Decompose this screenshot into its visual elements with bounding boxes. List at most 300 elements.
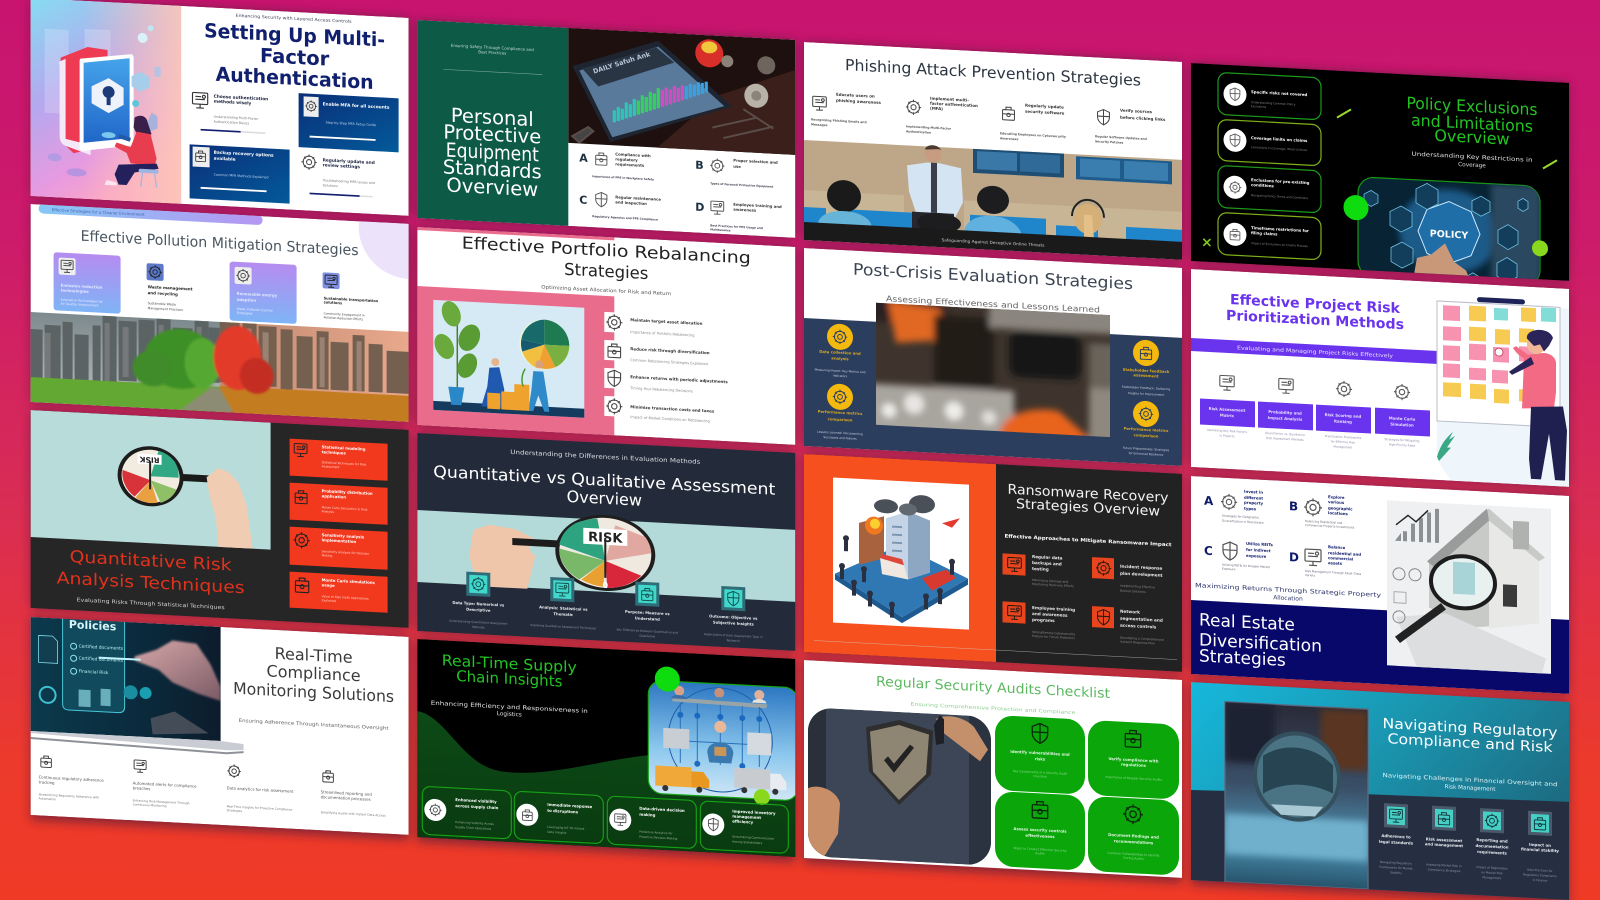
item D: D: [695, 201, 704, 214]
column text: Assessing Market Risk in: [1426, 862, 1462, 868]
item row: before clicking links: [1120, 115, 1166, 122]
column text: and management: [1425, 841, 1463, 848]
risk item cards: [290, 439, 388, 613]
checklist cards: regulations: [1121, 762, 1147, 768]
column labels: Key Differences Between Quantitative and: [617, 627, 678, 635]
card contents: to disruptions: [547, 808, 579, 814]
recovery items: [1002, 552, 1164, 646]
items: Invest in: [1244, 489, 1263, 495]
subtitle: Understanding the Differences in Evaluation Methods: [510, 449, 700, 466]
navy lower panel: [1191, 782, 1569, 900]
title: Prioritization Methods: [1226, 308, 1404, 333]
item columns: Simplifying Audits with Instant Data Access: [321, 810, 386, 818]
left rounded cards: conditions: [1251, 182, 1274, 188]
item A: regulatory: [615, 156, 638, 163]
method boxes: Monte Carlo: [1389, 415, 1416, 422]
right column: Stakeholder feedback: [1123, 367, 1170, 374]
title: [464, 236, 750, 282]
column text: legal standards: [1379, 839, 1414, 846]
title: Monitoring Solutions: [233, 679, 394, 706]
item D: awareness: [733, 207, 757, 213]
card contents: making: [639, 812, 656, 818]
item D: Maintenance: [710, 227, 731, 232]
left column: comparison: [828, 416, 853, 423]
right column: comparison: [1134, 432, 1159, 439]
recovery items: backups and: [1032, 560, 1062, 567]
photo: house under magnifier: [1387, 500, 1551, 674]
risk item cards: Analysis: [322, 509, 334, 514]
item A: [579, 150, 654, 181]
column text: in Finance: [1533, 878, 1548, 883]
column text: Impact on: [1529, 842, 1551, 848]
risk item cards: Value at Risk (VaR) Approaches: [322, 594, 369, 601]
slide: Real Estate Diversification Strategies: [1191, 476, 1569, 694]
recovery items: testing: [1032, 566, 1049, 572]
subtitle: Best Practices: [478, 49, 506, 56]
orange panel: [804, 454, 996, 662]
decorative x: ×: [1201, 235, 1213, 251]
recovery items: Implementing Effective: [1120, 584, 1155, 589]
title: Analysis Techniques: [57, 568, 245, 597]
title: Ransomware Recovery: [1008, 482, 1169, 506]
item B: use: [733, 164, 741, 169]
recovery items: programs: [1032, 617, 1055, 623]
left column: Performance metrics: [818, 409, 863, 416]
risk item cards: application: [322, 493, 346, 500]
method boxes: Ranking: [1334, 419, 1352, 424]
column labels: Thematic: [553, 611, 573, 617]
column labels: Methods: [472, 625, 485, 630]
column labels: Understanding Quantitative Assessment: [449, 619, 508, 626]
item row: Implement multi-: [930, 96, 969, 103]
card contents: Immediate response: [547, 802, 592, 809]
photo: blurred conference room: [864, 291, 1119, 450]
item A: Importance of PPE in Workplace Safety: [592, 174, 654, 181]
column text: Regulatory Compliance: [1523, 872, 1557, 878]
method boxes: [1200, 398, 1430, 454]
recovery items: Regular data: [1032, 554, 1063, 561]
left column: Measuring Impact: Key Metrics and: [815, 368, 866, 374]
risk item cards: Assessment: [322, 464, 340, 469]
item row: Messages: [811, 122, 828, 127]
recovery items: access controls: [1120, 623, 1157, 630]
column text: Stability: [1390, 870, 1402, 875]
title: Overview: [1434, 126, 1510, 149]
subtitle: Enhancing Security with Layered Access Controls: [236, 13, 352, 24]
column labels: [449, 600, 763, 644]
left column: Lessons Learned: Documenting: [817, 430, 863, 436]
item columns: [39, 754, 386, 821]
recovery items: Incident Response Plan: [1120, 640, 1155, 645]
column text: Compliance Strategies: [1428, 867, 1461, 873]
column labels: Exploring Qualitative Assessment Techniques: [531, 623, 597, 630]
item D: Best Practices for PPE Usage and: [710, 223, 763, 230]
card contents: Improved inventory: [732, 809, 776, 816]
card contents: Proactive Decision-Making: [639, 835, 677, 841]
rebalancing items: Impact of Market Conditions on Rebalancing: [630, 415, 710, 423]
item A: requirements: [615, 161, 645, 168]
cards: bottom insights: [422, 786, 788, 853]
item: backup recovery: Common MFA Methods Explained: [214, 173, 269, 179]
lower background wash: [1437, 302, 1569, 487]
slide: Real-Time Supply Chain Insights: [417, 639, 798, 864]
slide: Phishing Attack Prevention Strategies: [804, 42, 1182, 260]
card contents: Data-driven decision: [639, 806, 685, 813]
photo: shield on jacket: [808, 707, 991, 866]
left column: Indicators: [833, 374, 848, 378]
left rounded cards: Exclusions for pre-existing: [1251, 177, 1310, 185]
left rounded cards: Specific risks not covered: [1251, 89, 1308, 97]
item C: Regulatory Agencies and PPE Compliance: [592, 214, 658, 222]
title: Real-Time: [275, 644, 353, 667]
title: Real-Time Supply: [442, 651, 577, 676]
items: C: [1204, 544, 1213, 558]
item: regularly update: Troubleshooting MFA Issues and: [322, 178, 375, 185]
title: Effective Portfolio Rebalancing: [462, 233, 751, 268]
card contents: Leveraging IoT for Instant: [547, 825, 585, 831]
subtitle: [1382, 773, 1558, 796]
column text: Reporting and: [1476, 837, 1508, 844]
items: Utilize REITs: [1246, 541, 1273, 547]
item row: Regular Software Updates and: [1095, 134, 1147, 141]
item A: Compliance with: [615, 151, 651, 158]
items: for indirect: [1246, 547, 1271, 553]
checklist cards: Identify vulnerabilities and: [1010, 749, 1070, 757]
divider: [443, 69, 542, 75]
checklist cards: Verify compliance with: [1109, 756, 1159, 764]
column labels: Understand: [635, 615, 660, 622]
risk item cards: Statistical modeling: [322, 444, 366, 452]
left column: Data collection and: [819, 349, 861, 356]
recovery items: Employee training: [1032, 605, 1075, 612]
item: enable MFA: Step-by-Step MFA Setup Guide: [326, 120, 376, 127]
items: residential and: [1328, 550, 1361, 557]
subtitle pill: [39, 203, 263, 225]
item columns: Data analytics for risk assessment: [227, 785, 294, 794]
slide: Post-Crisis Evaluation Strategies: [804, 248, 1182, 466]
recovery items: Backup Solutions: [1120, 589, 1146, 594]
items: Balancing Residential and: [1305, 519, 1343, 525]
rebalancing items: Common Rebalancing Strategies Explained: [630, 358, 708, 366]
title: [1008, 482, 1169, 520]
method boxes: Simulation: [1390, 421, 1414, 428]
title: Setting Up Multi-: [204, 19, 385, 52]
photo: polluted vs clean city: [31, 312, 409, 422]
card: renewable energy: adoption: [237, 297, 256, 303]
checklist cards: Assess security controls: [1013, 826, 1067, 834]
items: assets: [1328, 560, 1343, 566]
photo: magnifying glass: [1225, 702, 1368, 889]
item B: [696, 158, 778, 188]
method boxes: Risk Assessment: [1209, 406, 1246, 413]
illustration: city disaster: [833, 478, 969, 630]
slide: Navigating Regulatory Compliance and Risk: [1191, 682, 1569, 900]
left rounded cards: Coverage limits on claims: [1251, 135, 1308, 143]
card contents: Among Stakeholders: [732, 840, 763, 845]
rebalancing items: Minimize transaction costs and taxes: [630, 404, 715, 414]
item row: Authentication: [906, 129, 931, 135]
item row: Awareness: [1000, 136, 1019, 141]
title: Effective Pollution Mitigation Strategies: [81, 229, 359, 259]
title: [1226, 292, 1404, 333]
column labels: Research: [727, 638, 740, 643]
risk item cards: Sensitivity Analysis for Decision: [322, 549, 369, 556]
risk item cards: Probability distribution: [322, 488, 373, 496]
risk item cards: Explained: [322, 598, 336, 603]
title: Real Estate: [1199, 610, 1295, 635]
method boxes: Risk Assessment Methods: [1266, 436, 1304, 442]
column labels: Analysis: Statistical vs: [539, 604, 588, 612]
item: transportation: solutions: [324, 300, 342, 305]
decorative marks: [1337, 109, 1557, 169]
title: [206, 23, 384, 89]
subtitle: Allocation: [1273, 594, 1303, 603]
right column: Performance metrics: [1124, 426, 1169, 433]
items: Explore: [1328, 494, 1345, 500]
title: Factor: [260, 44, 330, 71]
left rounded cards: Exclusions: [1251, 104, 1267, 109]
card: emission reduction: [54, 252, 121, 314]
item: waste management: Management Practices: [148, 306, 183, 312]
title: Strategies: [1199, 646, 1286, 671]
item columns: Streamlined reporting and: [321, 789, 372, 797]
checklist cards: During Audits: [1123, 856, 1144, 861]
risk item cards: usage: [322, 582, 335, 588]
items: various: [1328, 499, 1345, 505]
recovery items: plan development: [1120, 571, 1163, 578]
item columns: Enhancing Risk Management Through: [133, 798, 190, 805]
baseline rule: [814, 641, 1177, 660]
subtitle: [1412, 152, 1533, 172]
method boxes: Probability and: [1268, 409, 1302, 416]
photo: laptop with policies screen: Financial Risk: [79, 669, 109, 676]
method boxes: Risk Scoring and: [1325, 412, 1362, 419]
risk item cards: techniques: [322, 449, 346, 456]
item: waste management: Sustainable Waste: [148, 301, 176, 307]
item: transportation: [323, 272, 379, 322]
title: Phishing Attack Prevention Strategies: [845, 56, 1141, 90]
subtitle: Evaluating Risks Through Statistical Techniques: [77, 597, 225, 611]
card: emission reduction: Emission reduction: [61, 283, 103, 290]
illustration: logistics network: [648, 666, 798, 807]
item: choose methods: Understanding Multi-Factor: [214, 115, 259, 121]
slide: Effective Pollution Mitigation Strategies: [30, 204, 409, 422]
item row: phishing awareness: [836, 98, 881, 105]
checklist cards: effectiveness: [1025, 833, 1055, 839]
right column: assessment: [1133, 372, 1159, 379]
item row: [811, 89, 1166, 149]
subtitle: Ensuring Adherence Through Instantaneous Oversight: [239, 718, 389, 732]
slide: Effective Portfolio Rebalancing Strategies: [417, 227, 795, 445]
method boxes: Strategies for Mitigating: [1384, 437, 1420, 443]
column labels: Subjective Insights: [713, 620, 754, 627]
left column: analysis: [831, 355, 849, 361]
item B: Proper selection and: [733, 158, 778, 165]
title: Policy Exclusions: [1406, 93, 1537, 119]
item row: Educating Employees on Cybersecurity: [1000, 131, 1066, 139]
photo: tablet dashboard: [568, 28, 795, 155]
method boxes: Impact Analysis: [1268, 415, 1303, 422]
items: commercial: [1328, 555, 1353, 562]
item D: Employee training and: [733, 202, 782, 209]
title: [234, 647, 394, 702]
items: Commercial Property Investments: [1305, 523, 1355, 530]
items: Risk Management Through Asset Class: [1305, 569, 1362, 576]
checklist cards: recommendations: [1114, 838, 1154, 845]
items: B: [1289, 499, 1298, 514]
card: emission reduction: technologies: [61, 288, 89, 294]
item columns: Streamlining Regulatory Adherence with: [39, 792, 99, 800]
rebalancing items: Maintain target asset allocation: [630, 317, 703, 326]
card contents: Enhancing Visibility Across: [455, 820, 494, 826]
subtitle: Assessing Effectiveness and Lessons Learned: [886, 294, 1100, 315]
title: Strategies Overview: [1016, 496, 1160, 520]
photo: hand with risk magnifier: [31, 410, 271, 550]
slide: Policy Exclusions and Limitations Overview: [1191, 63, 1569, 303]
risk item cards: implementation: [322, 537, 357, 544]
item C: [579, 191, 661, 222]
card: emission reduction: Innovative Technologies for: [61, 298, 104, 304]
subtitle: Risk Management: [1444, 784, 1496, 793]
title: Quantitative vs Qualitative Assessment: [433, 462, 775, 499]
title: Compliance: [267, 661, 361, 685]
title: [1406, 93, 1538, 150]
item columns: Strategies: [227, 808, 242, 813]
right column: Future Preparedness: Strategies: [1123, 446, 1170, 452]
items: [1204, 487, 1362, 580]
rebalancing items: [604, 312, 728, 424]
risk item cards: Making: [322, 553, 332, 558]
title: Personal: [451, 104, 534, 131]
column labels: Applications of Each Assessment Type in: [704, 632, 763, 639]
column text: Frameworks for Market: [1379, 865, 1413, 871]
column labels: Data Type: Numerical vs: [452, 600, 505, 608]
items: exposure: [1246, 553, 1267, 559]
task board illustration: [1437, 295, 1567, 481]
item columns: Real-Time Insights for Proactive Compliance: [227, 804, 293, 812]
item: transportation: Community Engagement in: [324, 311, 365, 318]
item C: Regular maintenance: [615, 194, 661, 202]
column text: Risk assessment: [1426, 836, 1462, 843]
item C: C: [579, 194, 587, 207]
slide: Setting Up Multi-Factor Authentication: [31, 0, 409, 216]
title: Authentication: [216, 63, 374, 94]
item: backup recovery: Backup recovery options: [214, 150, 274, 159]
column text: Navigating Regulatory: [1380, 860, 1412, 866]
item: transportation: Sustainable transportation: [324, 296, 379, 303]
method boxes: Matrix: [1220, 413, 1235, 418]
recovery items: Incident response: [1120, 564, 1162, 571]
method icons: [1220, 374, 1410, 401]
items: Diversification in Real Estate: [1222, 519, 1264, 525]
item row: Regularly update: [1025, 103, 1064, 110]
item columns: tracking: [39, 779, 55, 785]
recovery items: Minimizing Damage and: [1032, 578, 1068, 584]
footer bar: [804, 222, 1182, 260]
checklist cards: Checklist: [1033, 774, 1048, 779]
item columns: breaches: [133, 785, 150, 791]
recovery items: Network: [1120, 609, 1140, 615]
title: Strategies: [564, 260, 648, 283]
subtitle: Ensuring Comprehensive Protection and Compliance: [911, 702, 1076, 716]
item: enable MFA: Enable MFA for all accounts: [323, 101, 390, 111]
items: Exposure: [1222, 567, 1236, 571]
green panel: [417, 20, 568, 226]
checklist cards: Importance of Regular Security Audits: [1105, 775, 1162, 782]
right column: Stakeholder Feedback: Gathering: [1122, 385, 1170, 391]
subtitle: Navigating Challenges in Financial Oversight and: [1382, 773, 1558, 788]
items: Variety: [1305, 573, 1315, 578]
column text: on Market Risk: [1481, 870, 1503, 875]
slide: Effective Project Risk Prioritization Methods: [1191, 269, 1569, 487]
photo: laptop with policies screen: Certified documents: [79, 644, 124, 652]
column labels: Qualitative: [639, 634, 655, 639]
items: property: [1244, 500, 1264, 506]
card contents: across supply chain: [455, 803, 499, 810]
column labels: Outcome: Objective vs: [709, 613, 758, 621]
rebalancing items: Reduce risk through diversification: [630, 346, 710, 355]
pink panel: [417, 227, 614, 435]
subtitle pill: Effective Strategies for a Cleaner Environment: [52, 207, 145, 217]
slide: Regular Security Audits Checklist: [804, 660, 1182, 885]
risk item cards: Monte Carlo simulations: [322, 577, 376, 585]
item D: [696, 200, 782, 232]
title: Overview: [446, 174, 538, 201]
method boxes: in Projects: [1220, 433, 1235, 438]
items: types: [1244, 506, 1257, 511]
subtitle: Coverage: [1458, 162, 1486, 170]
title: Chain Insights: [456, 667, 563, 691]
item: transportation: Pollution Reduction Efforts: [324, 315, 364, 321]
item: regularly update: Solutions: [323, 183, 338, 188]
recovery items: segmentation and: [1120, 616, 1163, 623]
rebalancing items: Enhance returns with periodic adjustments: [630, 374, 728, 384]
recovery items: Strengthening Cybersecurity: [1032, 630, 1075, 636]
checklist cards: Key Components of a Security Audit: [1013, 769, 1068, 776]
title: [1199, 610, 1322, 673]
title: Diversification: [1199, 630, 1322, 657]
item: waste management: [147, 263, 193, 313]
card: renewable energy: Waste Pollution Control: [237, 307, 273, 313]
subtitle: Effective Approaches to Mitigate Ransomware Impact: [1005, 534, 1172, 548]
title: [444, 108, 541, 196]
item row: Educate users on: [836, 92, 875, 99]
item columns: Automated alerts for compliance: [133, 780, 197, 789]
method boxes: Management: [1333, 444, 1353, 450]
photo: training room: [804, 138, 1182, 246]
recovery items: Posture for Future Protection: [1032, 634, 1075, 640]
card contents: Predictive Analytics for: [639, 830, 673, 835]
method boxes: for Effective Risk: [1331, 439, 1356, 445]
slide: Quantitative Risk Analysis Techniques: [31, 410, 409, 628]
item row: Security Patches: [1095, 139, 1124, 145]
column text: Adherence to: [1381, 833, 1411, 840]
item: regularly update: [301, 154, 375, 198]
title: Quantitative Risk: [70, 547, 232, 575]
subtitle: [1195, 582, 1382, 607]
left rounded cards: Impact of Exclusions on Claims Process: [1251, 241, 1308, 248]
card contents: [424, 792, 776, 846]
item row: security software: [1025, 109, 1065, 116]
risk item cards: Statistical Techniques for Risk: [322, 460, 367, 467]
subtitle: Ensuring Safety Through Compliance and: [451, 43, 534, 52]
recovery items: and awareness: [1032, 611, 1068, 618]
items: Balance: [1328, 544, 1346, 550]
recovery items: Developing a Comprehensive: [1120, 636, 1164, 642]
photo: tablet dashboard: DAILY Safuh Ank: [592, 50, 652, 76]
subtitle band: Evaluating and Managing Project Risks Effectively: [1237, 345, 1393, 360]
method boxes: Prioritization Frameworks: [1325, 434, 1362, 440]
